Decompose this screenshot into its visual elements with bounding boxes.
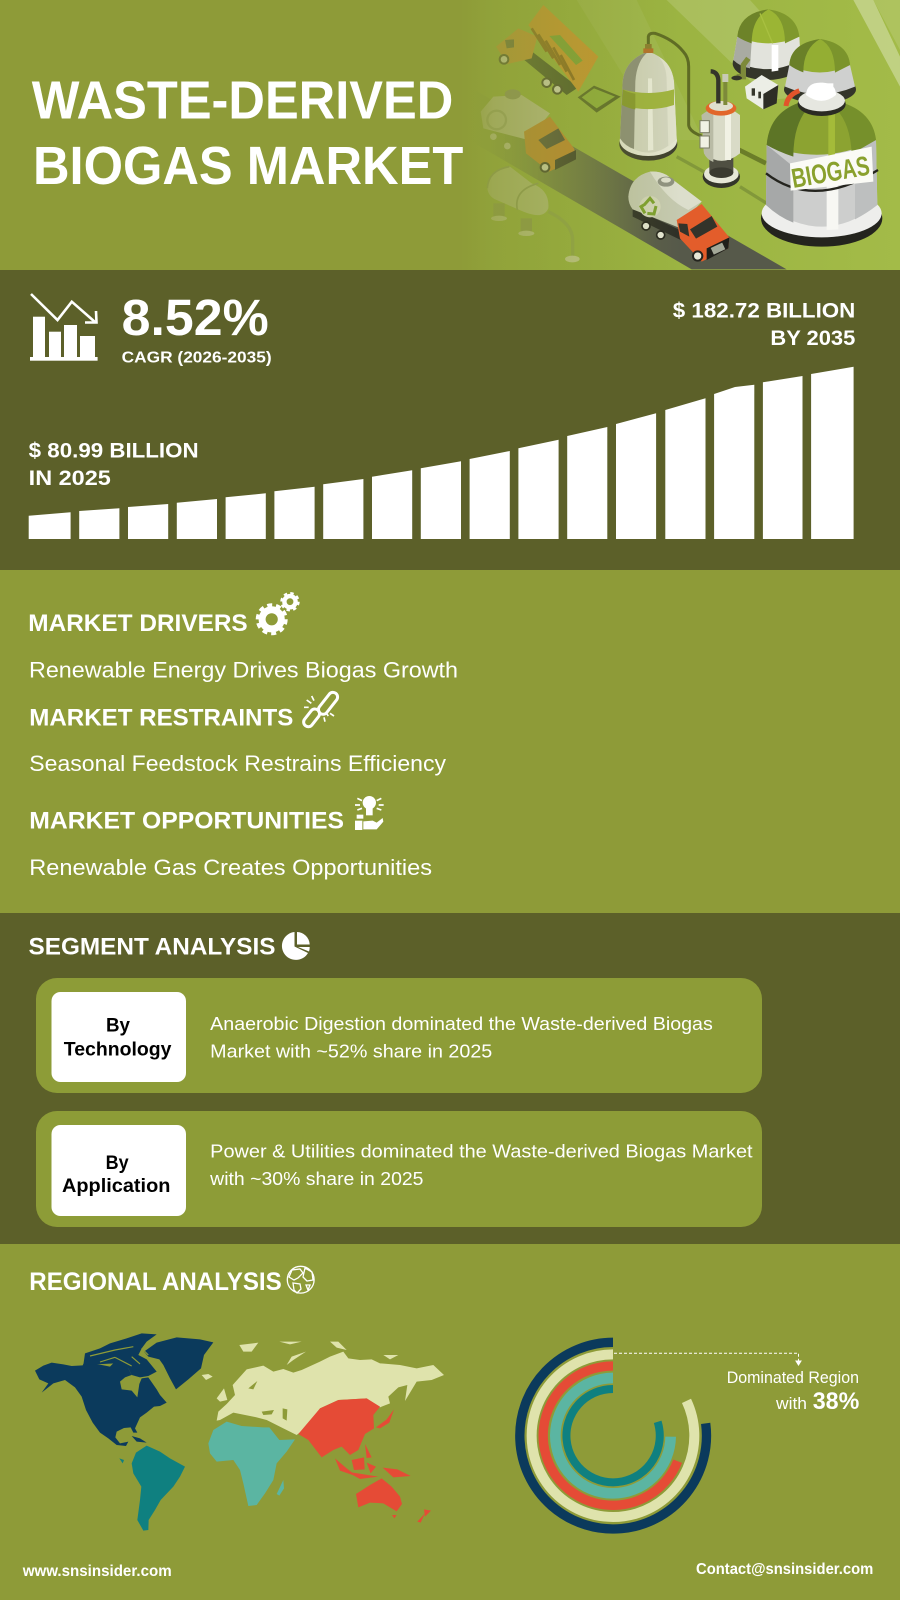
map: north america: [35, 1333, 213, 1446]
panel: market size: [0, 270, 900, 570]
callout: dominated region: Dominated Region: [727, 1368, 859, 1387]
label box: by application: Application: [62, 1175, 170, 1197]
label box: by application: [52, 1125, 186, 1216]
icon: pie chart: [282, 932, 310, 960]
heading: regional analysis: REGIONAL ANALYSIS: [29, 1268, 282, 1296]
label box: by technology: [52, 992, 186, 1082]
gas pipes: [677, 157, 767, 203]
arc: north america: [520, 1342, 706, 1529]
map: arctic channels: [90, 1347, 148, 1366]
storage tower: [619, 44, 677, 161]
arc: africa: [555, 1378, 671, 1493]
2035 value: BY 2035: [770, 326, 855, 350]
label box: by technology: By: [106, 1015, 130, 1037]
text: application finding: with ~30% share in 2025: [209, 1169, 424, 1189]
heading: market drivers: MARKET DRIVERS: [28, 610, 248, 637]
callout: dominated region: [727, 1368, 859, 1415]
callout arrow: [614, 1353, 801, 1365]
faded tanker: [481, 89, 576, 172]
cagr label: CAGR (2026-2035): [122, 349, 272, 366]
2035 value: $ 182.72 BILLION: [673, 299, 855, 323]
map: inland seas: [248, 1381, 287, 1421]
panel: header: [0, 0, 900, 270]
arc: europe and asia: [532, 1354, 694, 1517]
radial chart: [520, 1342, 706, 1529]
cagr value: 8.52%: [122, 289, 269, 346]
heading: segment analysis: SEGMENT ANALYSIS: [28, 933, 276, 960]
map: south america: [119, 1446, 185, 1531]
text: application finding: [209, 1142, 753, 1189]
2025 value: IN 2025: [29, 466, 111, 490]
label box: by application: By: [106, 1152, 129, 1174]
illustration fade: [460, 0, 680, 270]
title: [32, 71, 464, 196]
text: application finding: Power & Utilities dominated the Waste-derived Biogas Market: [210, 1142, 753, 1162]
callout: dominated region: 38%: [813, 1388, 859, 1415]
second tank dome: [784, 39, 856, 103]
bar chart: [29, 367, 854, 539]
heading: market opportunities: MARKET OPPORTUNITIES: [29, 808, 344, 835]
back tank dome: [731, 9, 801, 80]
world map: [35, 1333, 444, 1531]
map: europe and north asia: [202, 1342, 444, 1435]
text: technology finding: [210, 1014, 713, 1061]
icon: gears: [258, 593, 298, 634]
text: driver: Renewable Energy Drives Biogas Growth: [29, 657, 458, 682]
arc: south america: [566, 1389, 660, 1482]
map: asia pacific: [298, 1398, 431, 1523]
panel: segment analysis: [0, 913, 900, 1244]
icon: globe: [287, 1266, 314, 1293]
panel: regional analysis: [29, 1266, 859, 1531]
2025 value: $ 80.99 BILLION: [29, 439, 199, 463]
text: technology finding: Anaerobic Digestion dominated the Waste-derived Biogas: [210, 1014, 713, 1034]
footer: website: www.snsinsider.com: [22, 1563, 172, 1580]
main biogas tank: [761, 83, 882, 247]
text: opportunity: Renewable Gas Creates Opportunities: [29, 855, 432, 880]
front tanker truck: [628, 171, 729, 262]
label: biogas: BIOGAS: [789, 150, 872, 194]
2025 value: [29, 439, 199, 490]
label box: by technology: Technology: [64, 1039, 172, 1061]
arc: asia pacific: [543, 1366, 678, 1505]
digester column: [700, 71, 740, 188]
icon: idea in hand: [355, 796, 384, 830]
icon: falling chart: [30, 294, 98, 361]
title: WASTE-DERIVED: [32, 71, 453, 130]
footer: contact: Contact@snsinsider.com: [696, 1561, 873, 1578]
map: africa: [208, 1422, 295, 1506]
text: technology finding: Market with ~52% share in 2025: [210, 1041, 492, 1061]
text: restraint: Seasonal Feedstock Restrains Efficiency: [29, 751, 447, 776]
faded horizontal tank: [487, 167, 580, 262]
callout: dominated region: with: [775, 1394, 807, 1413]
card: by application: [36, 1111, 762, 1227]
heading: market restraints: MARKET RESTRAINTS: [29, 704, 293, 731]
illustration: biogas plant: [460, 0, 900, 270]
panel: market dynamics: [28, 593, 458, 880]
dump truck: [496, 5, 621, 113]
2035 value: [673, 299, 855, 350]
small control box: [745, 75, 778, 109]
connecting red pipe: [786, 91, 799, 106]
icon: broken link: [302, 690, 339, 729]
title: BIOGAS MARKET: [33, 137, 464, 196]
card: by technology: [36, 978, 762, 1093]
